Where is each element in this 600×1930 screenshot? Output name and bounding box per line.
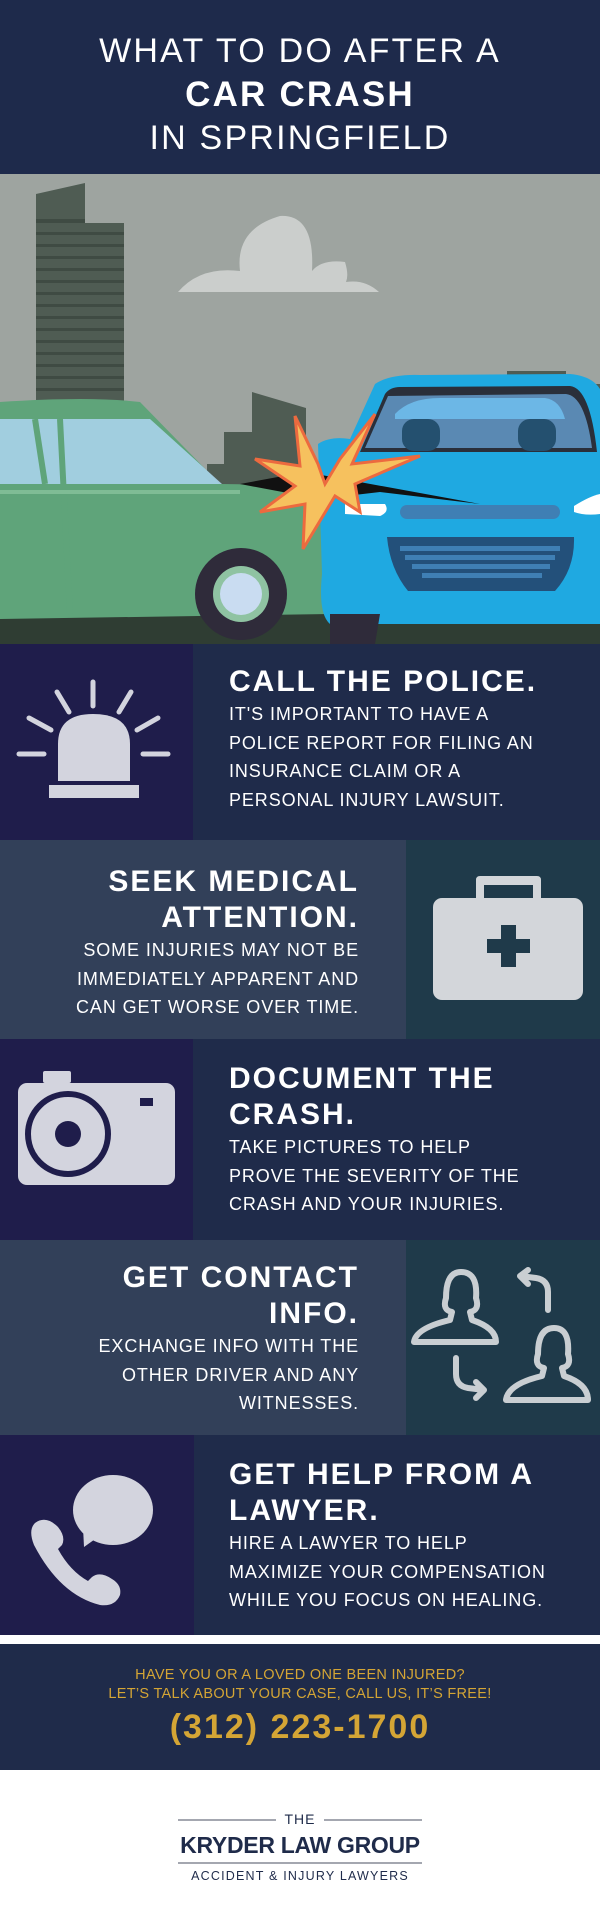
text: document the crash: TAKE PICTURES TO HELP	[229, 1137, 471, 1157]
header	[0, 0, 600, 174]
title	[99, 32, 501, 157]
text: document the crash	[229, 1062, 520, 1214]
text: seek medical attention: SEEK MEDICAL	[108, 865, 359, 898]
text: get help from a lawyer: LAWYER.	[229, 1494, 380, 1527]
text: document the crash: PROVE THE SEVERITY OF THE	[229, 1166, 520, 1186]
starburst	[255, 414, 420, 549]
logo: THE	[284, 1811, 316, 1827]
logo	[178, 1811, 422, 1883]
illustration: car crash scene	[0, 174, 600, 644]
icon: exchange contacts	[406, 1240, 600, 1435]
icon: siren	[0, 644, 193, 840]
panel: call the police	[0, 644, 600, 840]
blue car	[318, 374, 600, 624]
title: CAR CRASH	[185, 75, 415, 114]
green car	[0, 399, 330, 619]
text: call the police	[229, 665, 537, 810]
text: get contact info: GET CONTACT	[123, 1261, 359, 1294]
text: seek medical attention: SOME INJURIES MAY NOT BE	[83, 940, 359, 960]
text: get help from a lawyer: GET HELP FROM A	[229, 1458, 534, 1491]
title: WHAT TO DO AFTER A	[99, 32, 501, 70]
panel: get help from a lawyer	[0, 1435, 600, 1635]
text: get contact info	[99, 1261, 359, 1413]
icon: medical kit	[406, 840, 600, 1039]
text: call the police: PERSONAL INJURY LAWSUIT.	[229, 790, 505, 810]
text: document the crash: CRASH AND YOUR INJURIES.	[229, 1194, 504, 1214]
text: seek medical attention: ATTENTION.	[161, 901, 359, 934]
panel: document the crash	[0, 1039, 600, 1240]
text: document the crash: DOCUMENT THE	[229, 1062, 495, 1095]
text: get contact info: EXCHANGE INFO WITH THE	[99, 1336, 359, 1356]
text: call the police: INSURANCE CLAIM OR A	[229, 761, 461, 781]
title: IN SPRINGFIELD	[150, 119, 450, 157]
text: get contact info: WITNESSES.	[239, 1393, 359, 1413]
text: get help from a lawyer	[229, 1458, 546, 1610]
text: get help from a lawyer: WHILE YOU FOCUS ON HEALING.	[229, 1590, 543, 1610]
text: call the police: IT'S IMPORTANT TO HAVE A	[229, 704, 489, 724]
text: seek medical attention: CAN GET WORSE OVER TIME.	[76, 997, 359, 1017]
icon: phone with speech bubble	[0, 1435, 194, 1635]
text: get help from a lawyer: MAXIMIZE YOUR COMPENSATION	[229, 1562, 546, 1582]
text: document the crash: CRASH.	[229, 1098, 356, 1131]
call to action: LET’S TALK ABOUT YOUR CASE, CALL US, IT’S FREE!	[108, 1686, 492, 1702]
call to action	[0, 1644, 600, 1770]
text: seek medical attention: IMMEDIATELY APPARENT AND	[77, 968, 359, 988]
phone number: (312) 223-1700	[170, 1708, 430, 1746]
text: call the police: CALL THE POLICE.	[229, 665, 537, 698]
call to action: HAVE YOU OR A LOVED ONE BEEN INJURED?	[135, 1667, 465, 1683]
text: call the police: POLICE REPORT FOR FILING AN	[229, 732, 534, 752]
logo: KRYDER LAW GROUP	[180, 1832, 420, 1858]
panel: seek medical attention	[0, 840, 600, 1039]
text: get contact info: OTHER DRIVER AND ANY	[122, 1364, 359, 1384]
logo: ACCIDENT & INJURY LAWYERS	[191, 1869, 409, 1883]
text: get help from a lawyer: HIRE A LAWYER TO HELP	[229, 1533, 468, 1553]
panel: get contact info	[0, 1240, 600, 1435]
icon: camera	[0, 1039, 193, 1240]
text: seek medical attention	[76, 865, 359, 1017]
text: get contact info: INFO.	[269, 1297, 359, 1330]
